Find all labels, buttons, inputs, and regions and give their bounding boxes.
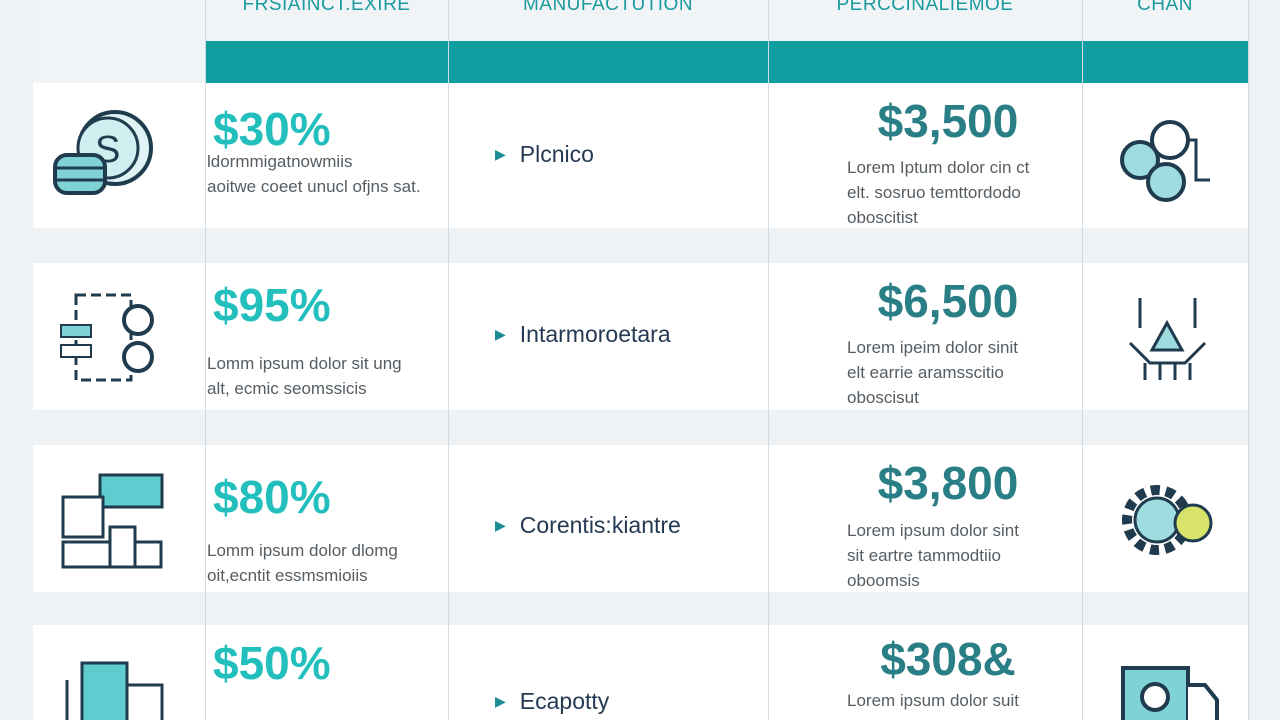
row1 text: aoitwe coeet unucl ofjns sat. <box>207 177 421 196</box>
row1 desc: elt. sosruo temttordodo <box>847 183 1021 202</box>
row3 middle: ▶ Corentis:kiantre <box>495 512 681 538</box>
icon: coins <box>53 110 153 195</box>
row 1 <box>33 83 1248 228</box>
row4 percent: $50% <box>213 637 331 689</box>
row2 value: $6,500 <box>878 275 1018 327</box>
row 4 <box>33 625 1248 720</box>
row1 desc <box>847 158 1030 227</box>
row3 value: $3,800 <box>878 457 1018 509</box>
row1 value: $3,500 <box>878 95 1018 147</box>
icon: network <box>60 294 154 382</box>
row2 text: alt, ecmic seomssicis <box>207 379 367 398</box>
row3 percent: $80% <box>213 471 331 523</box>
icon: coins cluster <box>1120 120 1210 202</box>
row2 middle: ▶ Intarmoroetara <box>495 321 671 347</box>
row2 desc: Lorem ipeim dolor sinit <box>847 338 1018 357</box>
row 3 <box>33 445 1248 592</box>
icon: coins: S <box>95 129 120 171</box>
icon: hand network <box>1129 298 1206 380</box>
row1 desc: oboscitist <box>847 208 918 227</box>
row1 middle: ▶ Plcnico <box>495 141 594 167</box>
row1 text: ldormmigatnowmiis <box>207 152 352 171</box>
row3 desc <box>847 521 1019 590</box>
icon: gear <box>1122 485 1212 555</box>
row3 desc: oboomsis <box>847 571 920 590</box>
row2 desc <box>847 338 1018 407</box>
row1 text <box>207 152 421 196</box>
row1 percent: $30% <box>213 103 331 155</box>
row4 desc: Lorem ipsum dolor suit <box>847 691 1019 710</box>
row1 desc: Lorem Iptum dolor cin ct <box>847 158 1029 177</box>
icon: buildings <box>66 662 164 720</box>
row2 desc: elt earrie aramsscitio <box>847 363 1004 382</box>
row3 desc: sit eartre tammodtiio <box>847 546 1001 565</box>
row 2 <box>33 263 1248 410</box>
row3 text <box>207 541 398 585</box>
icon: truck <box>1121 666 1219 720</box>
row3 text: oit,ecntit essmsmioiis <box>207 566 368 585</box>
icon: machinery <box>62 474 164 568</box>
teal header bar <box>205 41 1248 83</box>
row3 text: Lomm ipsum dolor dlomg <box>207 541 398 560</box>
row2 text <box>207 354 402 398</box>
row4 value: $308& <box>880 633 1016 685</box>
row2 text: Lomm ipsum dolor sit ung <box>207 354 402 373</box>
row3 desc: Lorem ipsum dolor sint <box>847 521 1019 540</box>
row2 percent: $95% <box>213 279 331 331</box>
row4 middle: ▶ Ecapotty <box>495 688 609 714</box>
header band <box>33 0 1248 83</box>
row2 desc: oboscisut <box>847 388 919 407</box>
